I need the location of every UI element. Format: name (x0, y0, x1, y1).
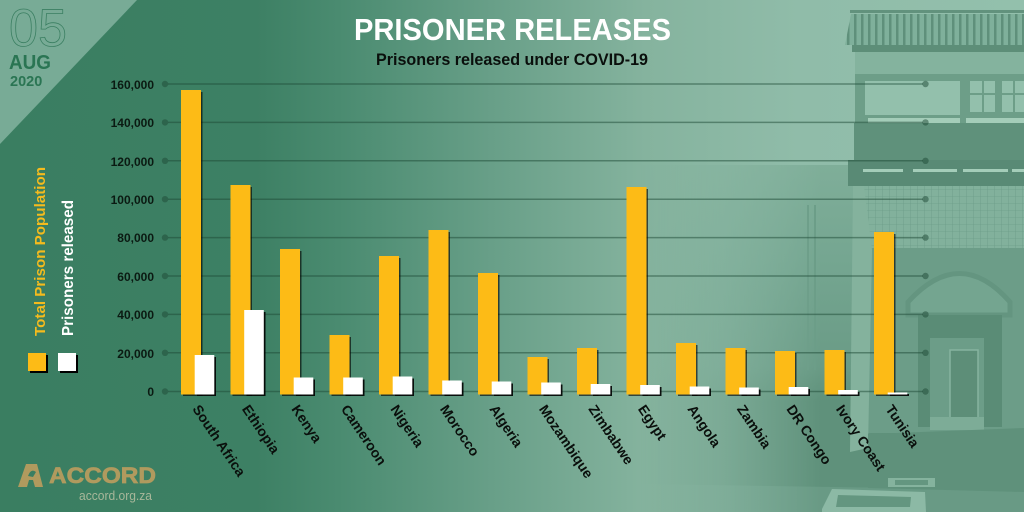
legend label: prisoners released: Prisoners released (60, 200, 77, 336)
y axis labels: 120,000 (111, 155, 154, 169)
photo: lower building wall (866, 248, 1024, 433)
website: accord.org.za (79, 488, 153, 503)
icon: ACCORD mark (18, 464, 43, 487)
subtitle: Prisoners released under COVID-19 (376, 51, 648, 69)
date day number: 05 (9, 0, 67, 58)
date badge (9, 0, 67, 90)
bars: Algeria (478, 273, 513, 396)
country labels: Ethiopia (239, 402, 283, 457)
country labels: Kenya (289, 402, 325, 446)
country labels: Zambia (734, 402, 775, 451)
photo: watchtower upper storey with windows (855, 52, 1024, 124)
y axis labels: 100,000 (111, 193, 154, 207)
photo: watchtower roof (845, 10, 1024, 52)
country labels: Egypt (635, 402, 670, 443)
y axis labels: 140,000 (111, 116, 154, 130)
bars: Tunisia (874, 232, 909, 396)
country labels: Cameroon (338, 402, 390, 468)
country labels: South Africa (190, 402, 249, 479)
bars: Morocco (428, 230, 464, 396)
photo: dark doorway (918, 315, 1002, 430)
bars: Nigeria (379, 256, 414, 396)
bars: South Africa (181, 90, 216, 396)
gridlines (162, 81, 929, 395)
legend swatch: total prison population (28, 353, 48, 373)
bars: Zimbabwe (577, 348, 612, 396)
legend (28, 167, 78, 373)
bars: Zambia (726, 348, 760, 396)
y axis labels (111, 78, 154, 399)
photo: white column (850, 186, 872, 452)
bars: Cameroon (330, 335, 364, 396)
country labels: DR Congo (784, 402, 835, 467)
bars: DR Congo (775, 351, 810, 396)
date month: AUG (9, 51, 51, 74)
legend label: total prison population: Total Prison Population (32, 167, 49, 336)
country labels: Ivory Coast (833, 402, 889, 474)
photo: safety net (858, 186, 1024, 250)
y axis labels: 40,000 (117, 308, 154, 322)
y axis labels: 80,000 (117, 231, 154, 245)
prison photograph backdrop (686, 10, 1024, 512)
bars: Kenya (280, 249, 315, 396)
date year: 2020 (10, 74, 42, 90)
photo: watchtower dark lower band (848, 123, 1024, 186)
title: PRISONER RELEASES (354, 12, 671, 47)
y axis labels: 0 (147, 385, 154, 399)
y axis labels: 60,000 (117, 270, 154, 284)
bars: Ethiopia (230, 185, 266, 396)
photo: ground (822, 428, 1024, 512)
bars: Egypt (626, 187, 662, 396)
country labels: Mozambique (536, 402, 597, 481)
ACCORD logo (18, 463, 156, 503)
logo wordmark: ACCORD (49, 463, 156, 488)
country labels: Zimbabwe (586, 402, 637, 468)
bar chart (181, 90, 909, 396)
country labels: Tunisia (883, 402, 923, 451)
country labels: Nigeria (388, 402, 427, 450)
date corner triangle (0, 0, 137, 144)
legend swatch: prisoners released (58, 353, 78, 373)
y axis labels: 160,000 (111, 78, 154, 92)
country labels: Algeria (487, 402, 526, 450)
country labels (190, 402, 923, 481)
photo: archway (908, 274, 1010, 315)
bars: Angola (676, 343, 711, 396)
photo: lower courtyard and wall (686, 165, 1024, 512)
country labels: Morocco (437, 402, 483, 459)
country labels: Angola (685, 402, 724, 450)
bars: Mozambique (528, 357, 562, 396)
bars: Ivory Coast (824, 350, 860, 396)
y axis labels: 20,000 (117, 347, 154, 361)
